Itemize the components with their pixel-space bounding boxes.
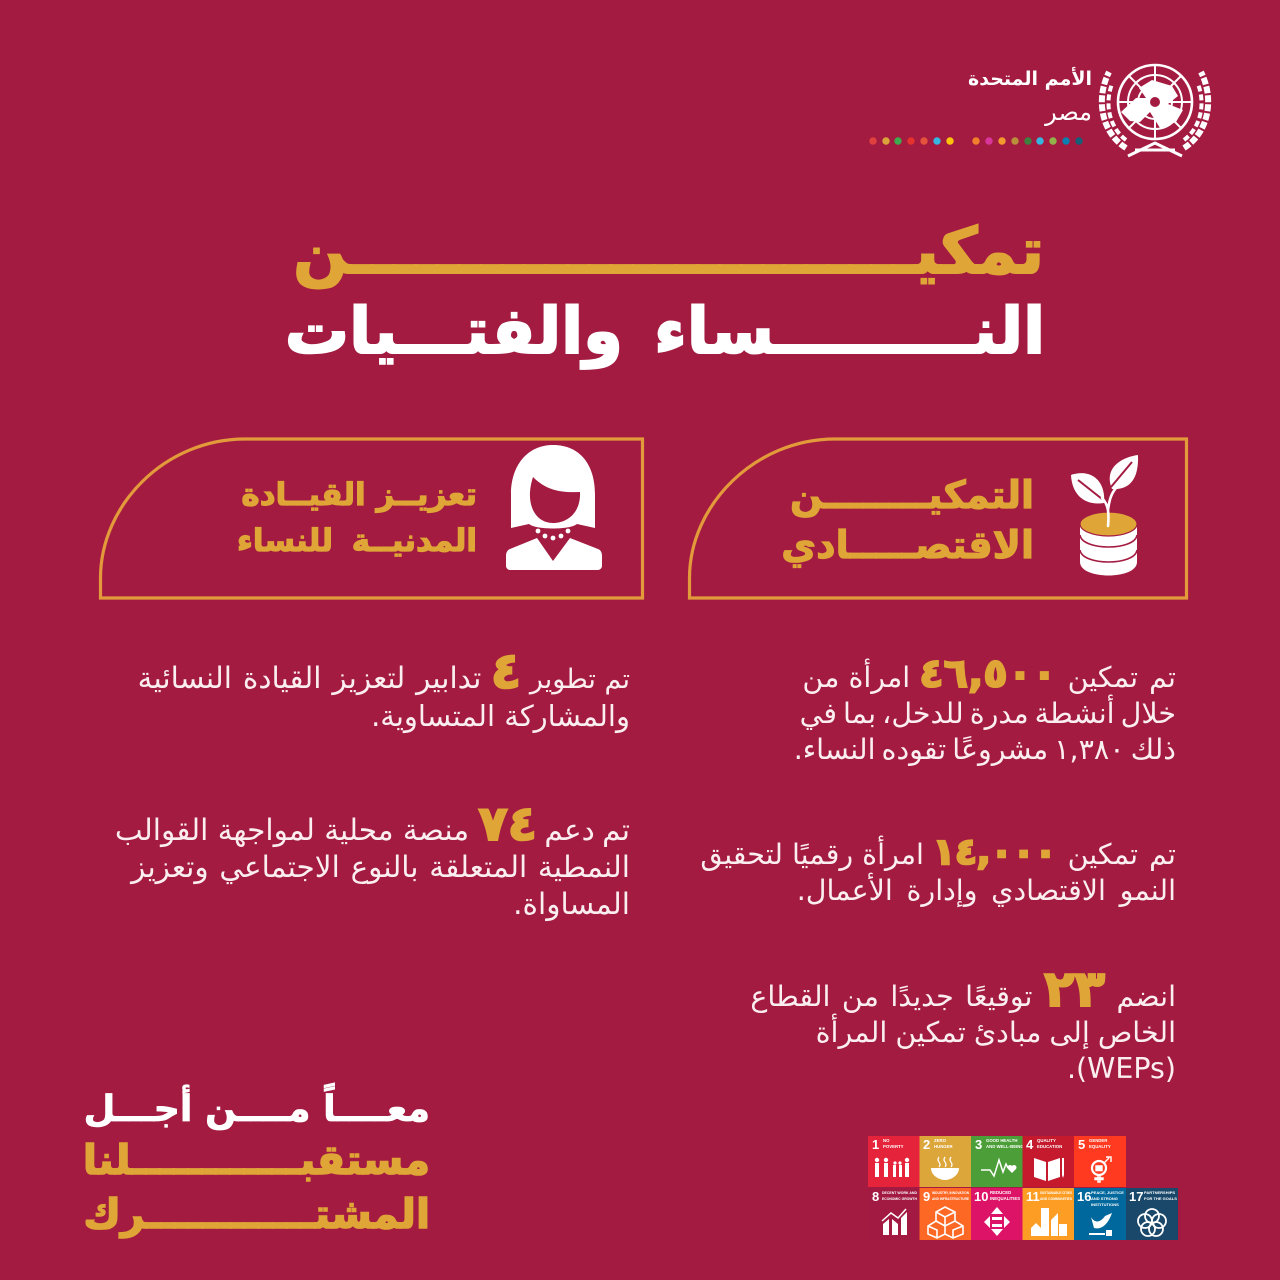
panel heading: economic empowerment — [781, 473, 1034, 568]
tile: goal 16 — [1074, 1188, 1126, 1240]
tile: goal 8 — [868, 1188, 920, 1240]
icon: plant on coins — [1071, 455, 1138, 576]
tile: goal 17 — [1126, 1188, 1178, 1240]
panel heading: women's civic leadership — [237, 477, 477, 559]
tile: goal 3 — [971, 1136, 1024, 1187]
tile: goal 16: INSTITUTIONS — [1091, 1202, 1119, 1207]
tile: goal 1 — [868, 1136, 920, 1187]
tile: goal 9: INDUSTRY, INNOVATION — [932, 1190, 969, 1195]
closing slogan gold: المشتــــــــــــرك — [83, 1190, 430, 1238]
closing slogan gold: مستقبــــــــــــلنا — [83, 1136, 430, 1184]
tile: goal 17: 17 — [1129, 1189, 1143, 1204]
tile: goal 1: 1 — [872, 1137, 879, 1152]
tile: goal 10: 10 — [974, 1189, 988, 1204]
tile: goal 3: AND WELL-BEING — [986, 1144, 1024, 1149]
tile: goal 4: 4 — [1026, 1137, 1034, 1152]
text block: 4 measures: والمشاركة المتساوية. — [371, 699, 630, 733]
text block: 74 platforms — [115, 796, 630, 922]
tile: goal 17: PARTNERSHIPS — [1144, 1190, 1175, 1195]
tile: goal 11: AND COMMUNITIES — [1040, 1196, 1072, 1201]
panel heading: economic empowerment: التمكيــــــــن — [790, 473, 1034, 517]
tile: goal 8: ECONOMIC GROWTH — [882, 1196, 917, 1201]
text block: 14,000 women: النمو الاقتصادي وإدارة الأعمال. — [797, 874, 1176, 907]
tile: goal 10: INEQUALITIES — [990, 1196, 1020, 1201]
tile: goal 4: EDUCATION — [1037, 1144, 1062, 1149]
panel heading: economic empowerment: الاقتصـــــادي — [781, 523, 1034, 567]
text block: 74 platforms: المساواة. — [513, 887, 630, 921]
tile: goal 2: ZERO — [934, 1138, 947, 1143]
text block: 46,500 women: ذلك ١,٣٨٠ مشروعًا تقوده النساء. — [794, 733, 1176, 766]
text block: 14,000 women — [700, 832, 1176, 908]
panel heading: women's civic leadership: المدنيــة للنساء — [237, 523, 477, 559]
tile: goal 11 — [1022, 1188, 1074, 1240]
tile: goal 8: DECENT WORK AND — [882, 1190, 917, 1195]
country name: مصر — [1045, 98, 1092, 126]
SDG colour dots — [869, 137, 1083, 145]
text block: 23 signatories — [750, 960, 1176, 1085]
tile: goal 2: HUNGER — [934, 1144, 954, 1149]
tile: goal 5: GENDER — [1089, 1138, 1108, 1143]
text block: 23 signatories: انضم ٢٣ توقيعًا جديدًا من القطاع — [750, 960, 1176, 1018]
icon: woman — [506, 445, 602, 570]
tile: goal 5: EQUALITY — [1089, 1144, 1111, 1149]
tile: goal 4: QUALITY — [1037, 1138, 1056, 1143]
text block: 46,500 women: خلال أنشطة مدرة للدخل، بما في — [800, 697, 1176, 730]
tile: goal 16: 16 — [1077, 1189, 1091, 1204]
panel: women's civic leadership — [98, 437, 644, 600]
panel: economic empowerment — [688, 437, 1188, 600]
tile: goal 4 — [1022, 1136, 1074, 1187]
tile: goal 5 — [1074, 1136, 1126, 1187]
closing slogan white: معــــاً مــــن أجـــل — [84, 1087, 430, 1130]
tile: goal 3: 3 — [975, 1137, 982, 1152]
title line 2: النـــــــــساء والفتـــيات — [285, 295, 1045, 369]
panel heading: women's civic leadership: تعزيــز القيــادة — [241, 477, 477, 513]
text block: 46,500 women — [794, 651, 1176, 766]
tile: goal 3: GOOD HEALTH — [986, 1138, 1017, 1143]
text block: 46,500 women: تم تمكين ٤٦,٥٠٠ امرأة من — [802, 651, 1176, 697]
closing slogan gold — [83, 1136, 430, 1239]
tile: goal 16: PEACE, JUSTICE — [1091, 1190, 1124, 1195]
tile: goal 1: NO — [883, 1138, 890, 1143]
tile: goal 2 — [920, 1136, 971, 1187]
text block: 23 signatories: الخاص إلى مبادئ تمكين المرأة — [816, 1016, 1176, 1049]
tile: goal 17: FOR THE GOALS — [1144, 1196, 1177, 1201]
text block: 74 platforms: تم دعم ٧٤ منصة محلية لمواجهة القوالب — [115, 796, 630, 852]
text block: 4 measures: تم تطوير ٤ تدابير لتعزيز القيادة النسائية — [138, 642, 630, 700]
tile: goal 9: AND INFRASTRUCTURE — [932, 1196, 969, 1201]
title line 1: تمكيــــــــــــــــــــــــــن — [293, 214, 1044, 288]
text block: 4 measures — [138, 642, 630, 734]
tile: goal 1: POVERTY — [883, 1144, 904, 1149]
tile: goal 5: 5 — [1078, 1137, 1085, 1152]
tile: goal 11: SUSTAINABLE CITIES — [1040, 1190, 1072, 1195]
tile: goal 16: AND STRONG — [1091, 1196, 1118, 1201]
tile: goal 9: 9 — [923, 1189, 930, 1204]
tile: goal 10 — [971, 1188, 1022, 1240]
SDG tiles grid — [868, 1136, 1178, 1240]
tile: goal 8: 8 — [872, 1189, 879, 1204]
tile: goal 11: 11 — [1026, 1189, 1040, 1204]
text block: 14,000 women: تم تمكين ١٤,٠٠٠ امرأة رقميًا لتحقيق — [700, 832, 1176, 873]
tile: goal 9 — [920, 1188, 971, 1240]
text block: 23 signatories: (WEPs). — [1067, 1052, 1176, 1085]
text block: 74 platforms: النمطية المتعلقة بالنوع الاجتماعي وتعزيز — [131, 850, 630, 884]
organisation name: الأمم المتحدة — [968, 68, 1092, 90]
tile: goal 10: REDUCED — [990, 1190, 1011, 1195]
UN emblem — [1098, 64, 1212, 158]
tile: goal 2: 2 — [923, 1137, 930, 1152]
